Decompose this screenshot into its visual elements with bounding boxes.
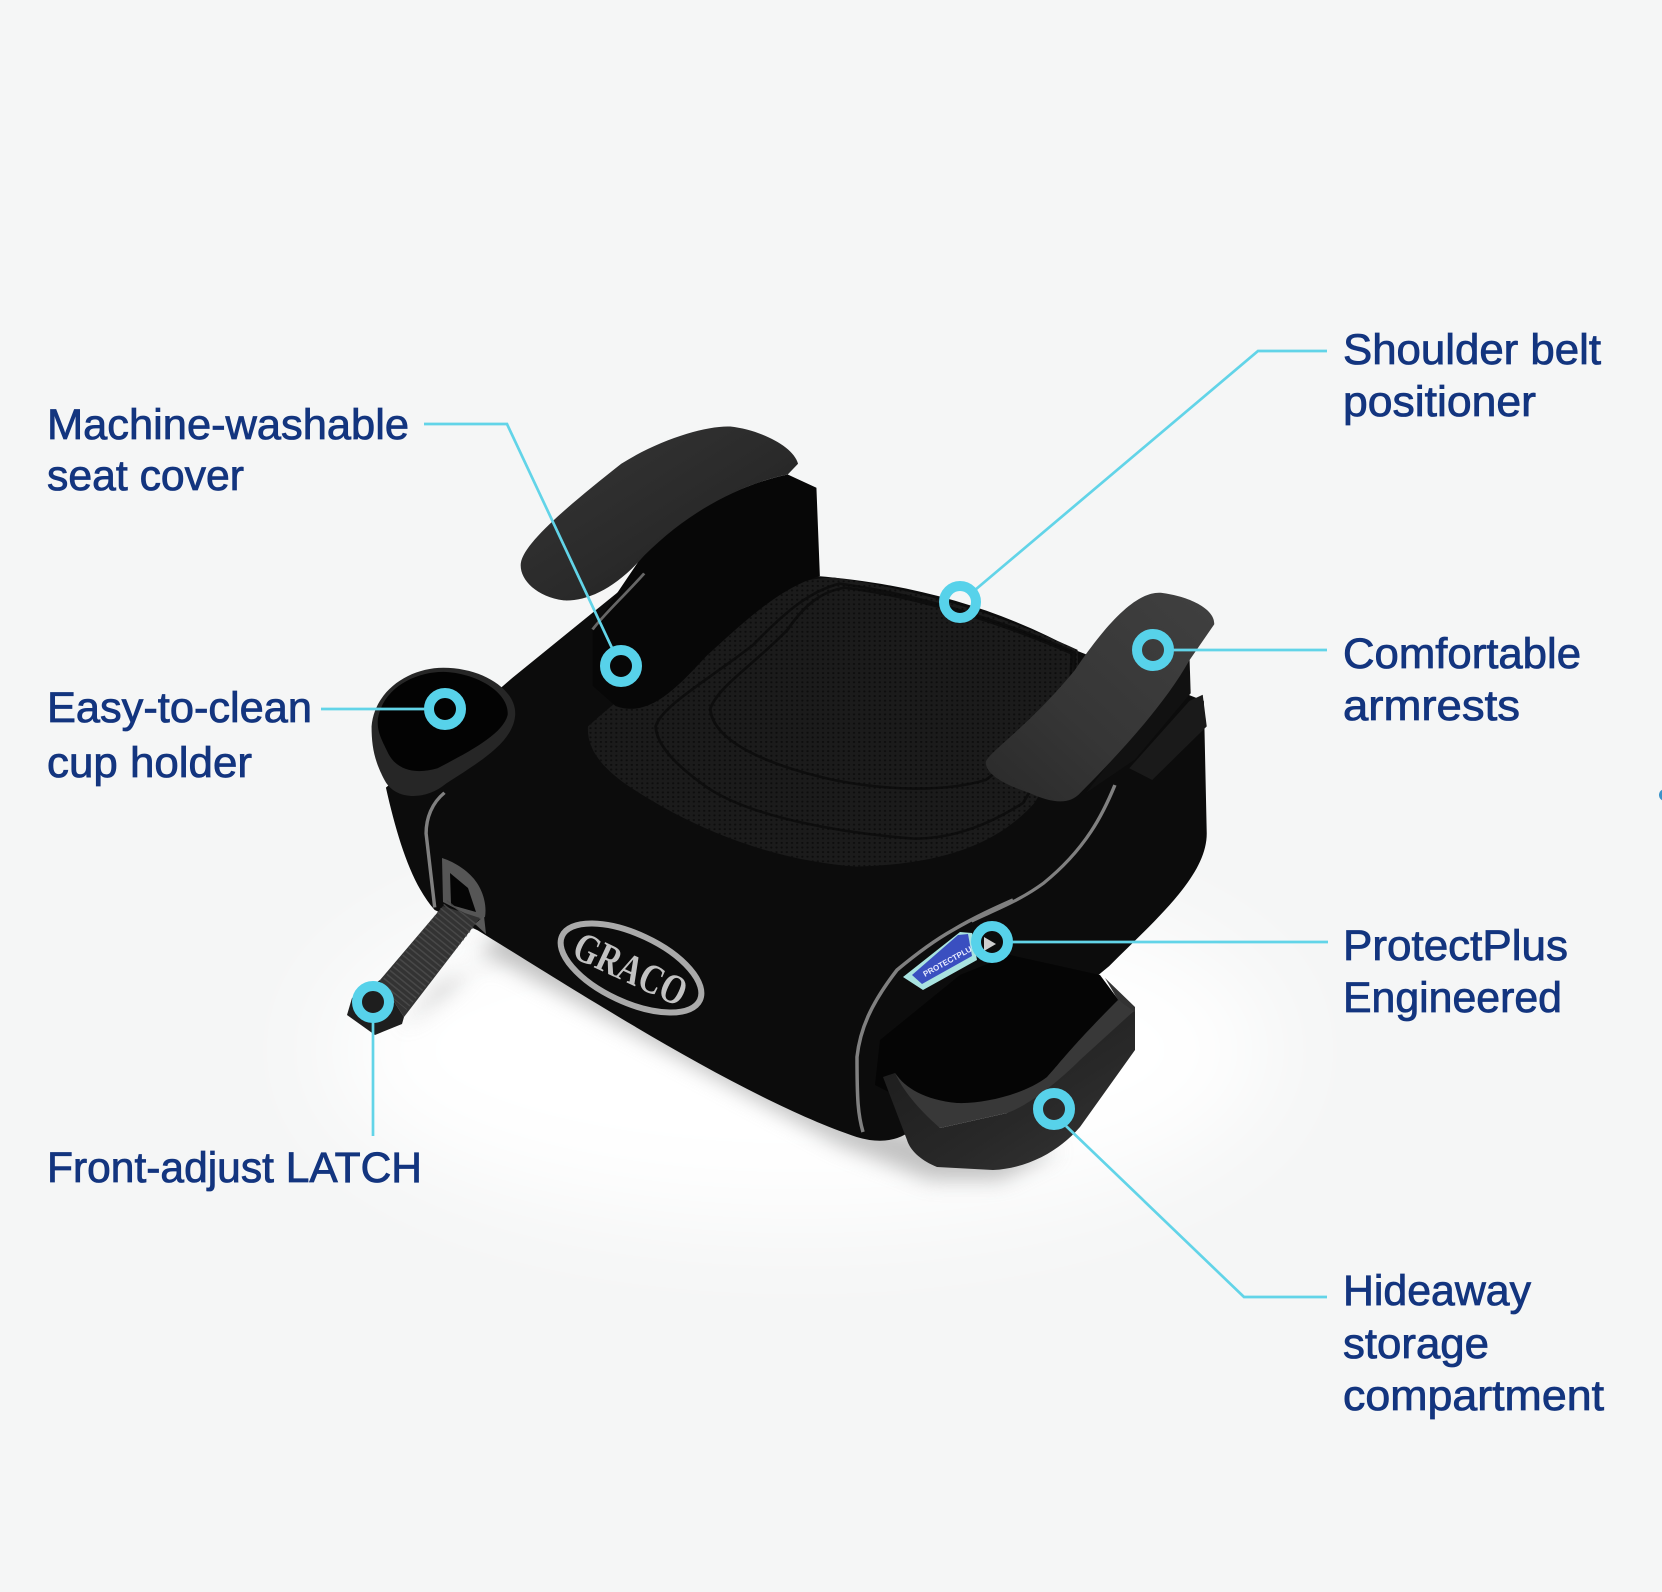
seat base and cushion <box>372 426 1214 1141</box>
callout: shoulder belt positioner <box>944 327 1601 618</box>
cup holder <box>372 668 515 796</box>
booster seat illustration <box>347 426 1214 1170</box>
callout: comfortable armrests <box>1137 631 1581 730</box>
leader line <box>424 424 612 648</box>
callout: ProtectPlus Engineered <box>976 923 1568 1022</box>
drawer top face <box>895 1000 1135 1128</box>
ring marker <box>976 926 1008 958</box>
callout: front-adjust LATCH <box>47 986 422 1192</box>
right piping <box>971 785 1115 921</box>
leader line <box>372 1020 374 1136</box>
callout: hideaway storage compartment <box>1038 1093 1604 1420</box>
right armrest <box>986 593 1214 801</box>
label: compartment <box>1343 1373 1604 1420</box>
drawer back corner <box>1105 978 1135 1012</box>
upper left piping <box>593 573 644 630</box>
ring marker <box>429 693 461 725</box>
left armrest <box>521 426 798 600</box>
label <box>1343 327 1601 426</box>
right arm support <box>1129 695 1207 780</box>
label: Hideaway <box>1343 1268 1532 1315</box>
label: Easy-to-clean <box>47 685 312 732</box>
callout: cup holder <box>47 685 461 787</box>
label <box>1343 923 1568 1022</box>
label: Machine-washable <box>47 402 409 449</box>
label: Front-adjust LATCH <box>47 1145 422 1192</box>
leader line <box>1172 649 1327 651</box>
leader line <box>1066 1126 1327 1297</box>
seat cushion middle <box>656 584 1075 839</box>
label: positioner <box>1343 379 1536 426</box>
floor glow <box>330 880 1270 1220</box>
ring marker <box>1137 634 1169 666</box>
label: Shoulder belt <box>1343 327 1601 374</box>
label <box>47 685 312 787</box>
storage drawer <box>875 955 1135 1170</box>
seat cushion outer <box>588 577 1080 867</box>
ProtectPlus tag <box>903 932 996 990</box>
seat body <box>386 571 1207 1141</box>
label: cup holder <box>47 740 252 787</box>
label <box>1343 631 1581 730</box>
left arm support <box>593 474 820 709</box>
right arm post <box>1086 658 1191 793</box>
drawer interior <box>875 955 1120 1118</box>
left piping <box>426 793 444 907</box>
label <box>47 402 409 500</box>
label <box>1343 1268 1604 1420</box>
ring marker <box>605 650 637 682</box>
callout: machine-washable seat cover <box>47 402 637 682</box>
leader line <box>975 351 1327 590</box>
label: storage <box>1343 1321 1489 1368</box>
ring marker <box>944 586 976 618</box>
label: armrests <box>1343 683 1520 730</box>
piping beside storage <box>857 900 1013 1132</box>
seat shadow <box>400 920 1060 1180</box>
label: ProtectPlus <box>1343 923 1568 970</box>
leader line <box>1011 941 1328 943</box>
small edge marker <box>1659 789 1662 801</box>
ProtectPlus tag: PROTECTPLUS <box>922 942 979 979</box>
Graco badge: GRACO <box>566 924 694 1016</box>
LATCH slot <box>442 858 486 934</box>
leader line <box>321 708 426 710</box>
drawer front <box>883 1010 1135 1170</box>
label: seat cover <box>47 453 244 500</box>
ring marker <box>1038 1093 1070 1125</box>
LATCH strap <box>347 906 480 1035</box>
label: Engineered <box>1343 975 1562 1022</box>
ring marker <box>357 986 389 1018</box>
seat cushion inner <box>710 588 1072 789</box>
label: Comfortable <box>1343 631 1581 678</box>
